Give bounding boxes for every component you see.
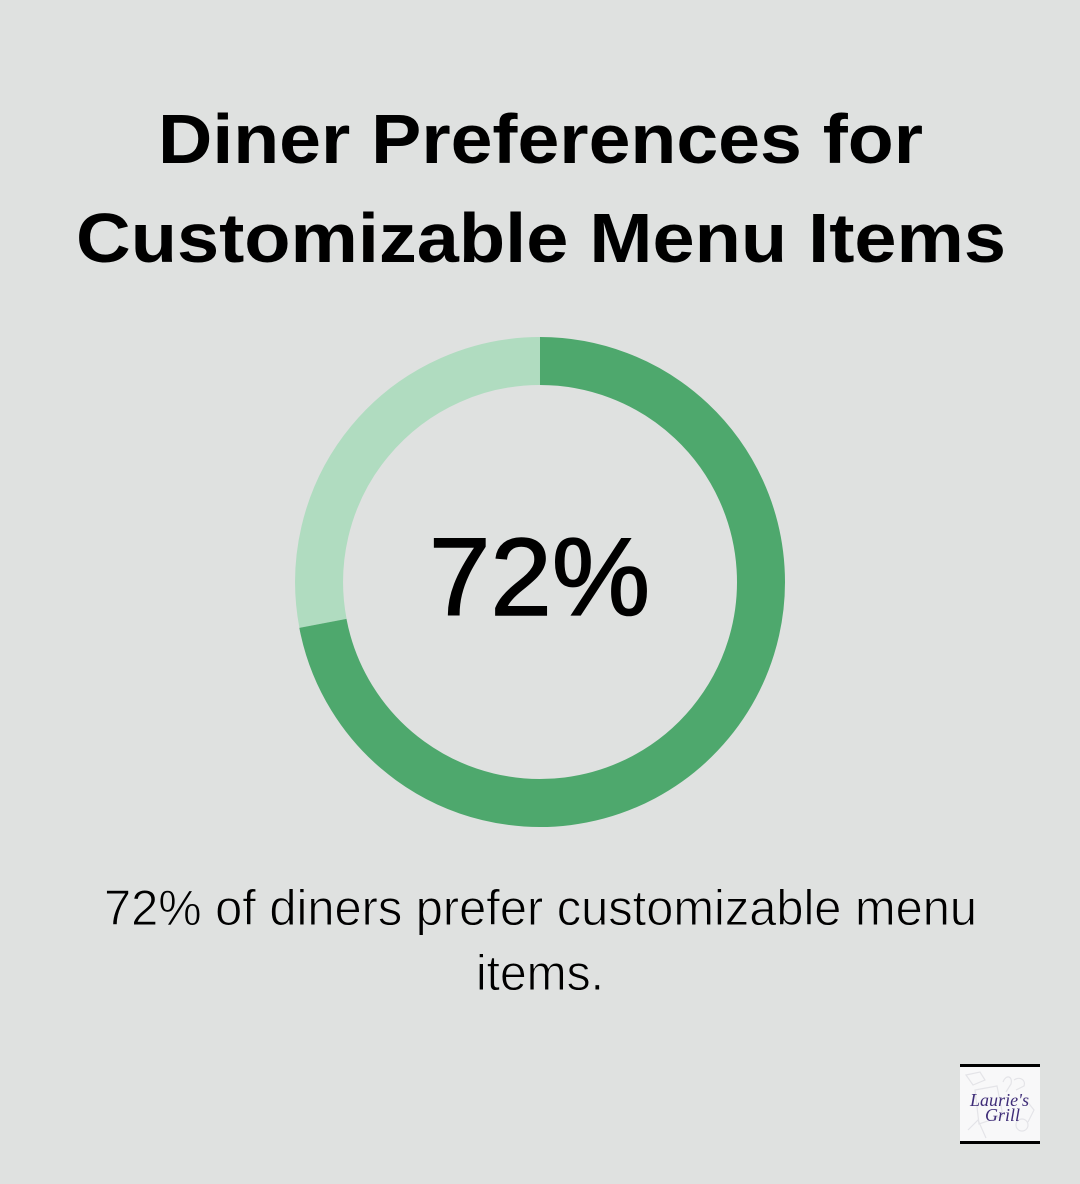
- 72% ring segment: [323, 361, 761, 803]
- logo: Laurie's Grill: [960, 1064, 1040, 1144]
- description text: [104, 880, 977, 1001]
- title: [76, 100, 1006, 277]
- description text: 72% of diners prefer customizable menu: [104, 880, 977, 936]
- title: Diner Preferences for: [158, 100, 923, 178]
- title: Customizable Menu Items: [76, 199, 1006, 277]
- donut chart: 72%: [319, 361, 761, 803]
- logo: Laurie's Grill: Grill: [985, 1105, 1020, 1125]
- center value: 72%: [429, 516, 650, 639]
- description text: items.: [476, 945, 604, 1001]
- remaining 28% ring segment: [319, 361, 540, 623]
- logo: Laurie's Grill: Laurie's: [969, 1090, 1029, 1110]
